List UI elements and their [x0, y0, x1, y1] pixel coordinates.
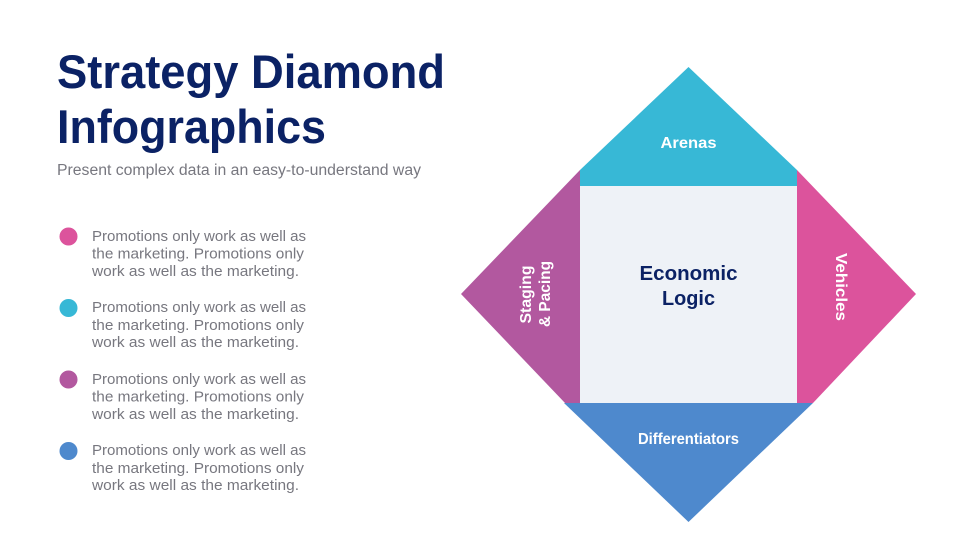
- text block 4: the marketing. Promotions only: [92, 460, 305, 477]
- text block 3: Promotions only work as well as: [92, 371, 306, 388]
- panel: economic logic centre: [580, 186, 797, 403]
- text block 4: Promotions only work as well as: [92, 442, 306, 459]
- panel: vehicles: [797, 170, 916, 403]
- text block 1: work as well as the marketing.: [91, 263, 299, 280]
- text block 2: work as well as the marketing.: [91, 334, 299, 351]
- text block 3: [91, 371, 306, 423]
- list item 1: [60, 228, 306, 280]
- title: Strategy Diamond: [57, 45, 445, 98]
- subtitle: Present complex data in an easy-to-understand way: [57, 162, 421, 179]
- list item 4: [60, 442, 306, 494]
- icon: cyan bullet: [60, 299, 78, 317]
- text block 3: the marketing. Promotions only: [92, 388, 305, 406]
- text block 4: work as well as the marketing.: [91, 477, 299, 494]
- icon: pink bullet: [60, 228, 78, 246]
- icon: purple bullet: [60, 370, 78, 388]
- text block 1: the marketing. Promotions only: [92, 246, 305, 262]
- text block 2: Promotions only work as well as: [92, 299, 306, 316]
- icon: blue bullet: [60, 442, 78, 460]
- panel: arenas: [580, 67, 797, 186]
- panel: vehicles: Vehicles: [832, 253, 849, 321]
- panel: arenas: Arenas: [660, 135, 717, 152]
- text block 4: [91, 442, 306, 494]
- text block 1: [91, 228, 306, 280]
- list item 2: [60, 299, 306, 351]
- panel: staging and pacing: Staging: [518, 266, 535, 324]
- text block 2: [91, 299, 306, 351]
- text block 2: the marketing. Promotions only: [92, 317, 305, 334]
- panel: staging and pacing: [461, 170, 580, 403]
- panel: differentiators: Differentiators: [638, 431, 739, 448]
- panel: economic logic centre: Logic: [662, 287, 715, 310]
- text block 3: work as well as the marketing.: [91, 406, 299, 423]
- title: [57, 45, 445, 153]
- title: Infographics: [57, 100, 326, 153]
- panel: economic logic centre: Economic: [640, 262, 738, 285]
- list item 3: [60, 370, 306, 423]
- strategy diamond diagram: [461, 67, 916, 522]
- panel: differentiators: [564, 403, 813, 522]
- text block 1: Promotions only work as well as: [92, 228, 306, 245]
- panel: staging and pacing: & Pacing: [537, 261, 554, 327]
